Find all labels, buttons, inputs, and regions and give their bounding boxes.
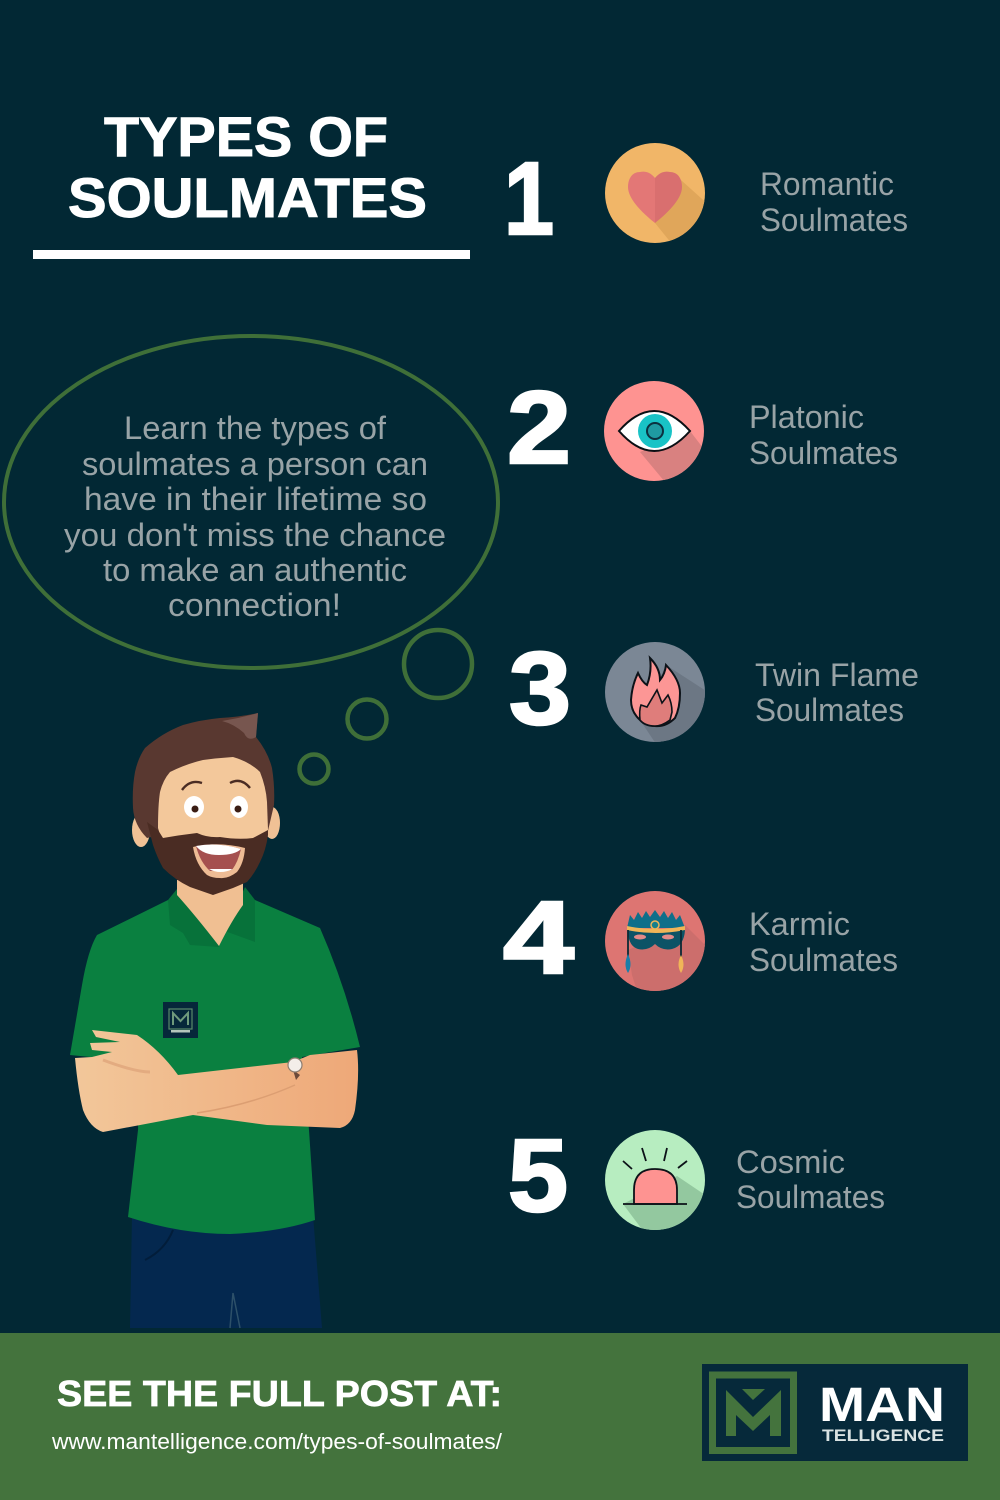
label: Karmic	[749, 906, 850, 942]
title: TYPES OF	[104, 105, 388, 168]
item 4: karmic	[503, 891, 897, 991]
illustration: bearded man in green polo	[70, 713, 360, 1328]
beard	[147, 822, 268, 895]
label: Soulmates	[749, 942, 898, 978]
speech bubble: intro text: to make an authentic	[103, 552, 407, 588]
icon: rising sun	[605, 1130, 705, 1230]
label: Cosmic	[736, 1144, 845, 1180]
label	[736, 1144, 885, 1215]
mouth	[193, 844, 245, 878]
number 5: 5	[508, 1118, 568, 1233]
icon: eye	[604, 381, 704, 481]
hair	[133, 713, 274, 838]
trousers	[130, 1215, 322, 1328]
speech bubble: intro text: connection!	[168, 587, 341, 623]
item 2: platonic	[510, 381, 897, 481]
label: Romantic	[760, 166, 894, 202]
ears	[132, 813, 150, 847]
icon: heart	[605, 143, 705, 243]
number 2: 2	[507, 370, 571, 485]
title: SOULMATES	[68, 166, 427, 229]
number 1: 1	[504, 141, 554, 256]
speech bubble: intro text: Learn the types of	[124, 410, 386, 446]
logo: TELLIGENCE	[822, 1427, 944, 1445]
logo: MAN	[819, 1379, 945, 1432]
eyes	[182, 781, 250, 818]
label: Soulmates	[755, 692, 904, 728]
label: Twin Flame	[755, 657, 919, 693]
crossed arms	[75, 1030, 358, 1132]
item 3: twin flame	[510, 642, 918, 742]
label: Platonic	[749, 399, 864, 435]
speech bubble: intro text	[4, 336, 498, 668]
label	[755, 657, 919, 728]
number 4: 4	[503, 880, 574, 995]
footer url: www.mantelligence.com/types-of-soulmates/	[51, 1429, 503, 1454]
face	[158, 757, 268, 855]
label: Soulmates	[736, 1179, 885, 1215]
footer call to action: SEE THE FULL POST AT:	[57, 1373, 502, 1414]
item 5: cosmic	[510, 1130, 884, 1230]
speech bubble: intro text: have in their lifetime so	[84, 481, 427, 517]
speech bubble: intro text: soulmates a person can	[82, 446, 428, 482]
label	[749, 906, 898, 978]
thought bubble circles	[300, 630, 472, 784]
wristwatch	[288, 1058, 302, 1080]
collar	[168, 887, 255, 947]
item 1: romantic	[508, 143, 907, 243]
shirt badge	[163, 1002, 198, 1038]
icon: flame	[605, 642, 705, 742]
number 3: 3	[509, 631, 571, 746]
logo	[702, 1364, 968, 1461]
icon: feather mask	[605, 891, 705, 991]
label	[749, 399, 898, 471]
footer band	[0, 1333, 1000, 1500]
label	[760, 166, 908, 238]
label: Soulmates	[749, 435, 898, 471]
neck	[177, 875, 243, 946]
shirt	[70, 900, 360, 1234]
speech bubble: intro text: you don't miss the chance	[64, 517, 446, 553]
label: Soulmates	[760, 202, 908, 238]
title	[33, 105, 470, 259]
